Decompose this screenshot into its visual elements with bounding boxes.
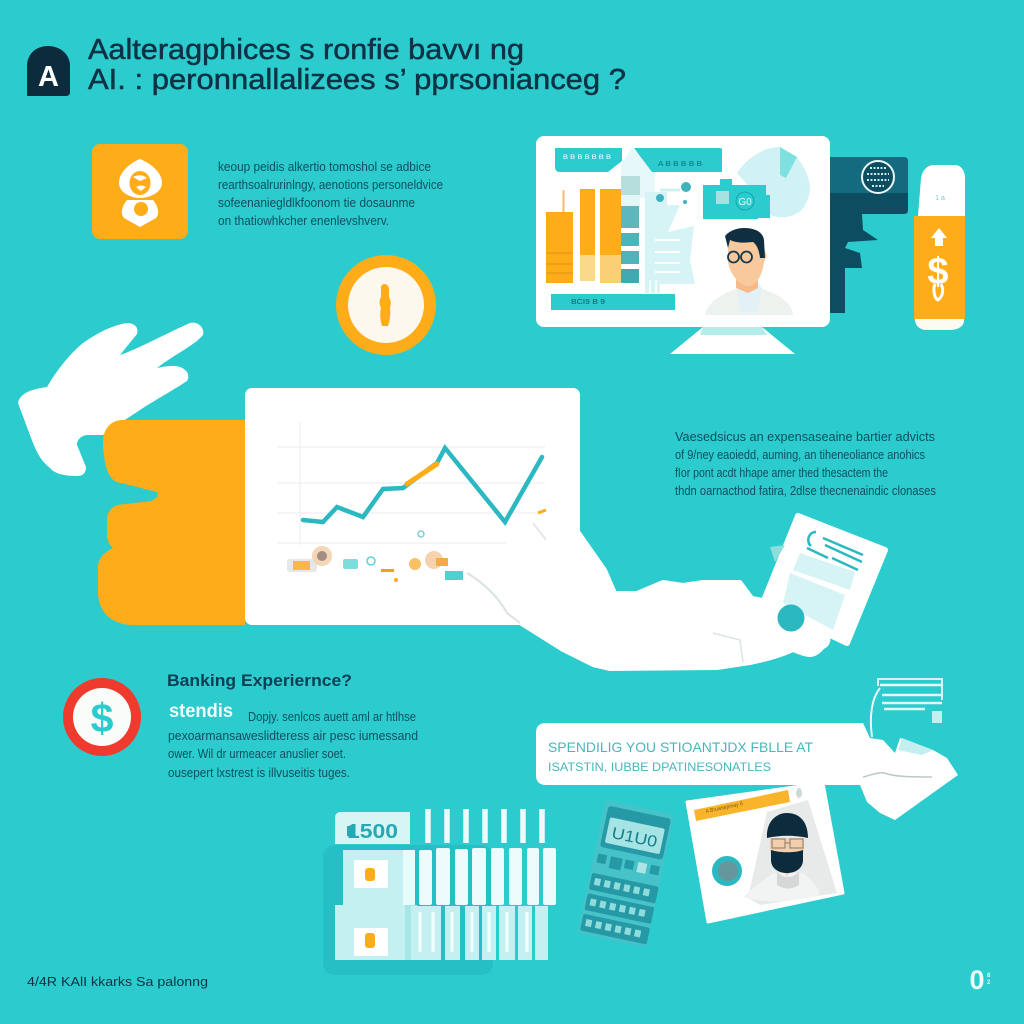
text block: top left: rearthsoalrurinlngy, aenotions personeldvice (218, 177, 443, 192)
title: AI. : peronnallalizees s’ pprsonianceg ? (88, 64, 626, 96)
document card held in hand (763, 516, 885, 643)
avatar photo circle (712, 856, 742, 886)
icon: orange location badge (92, 144, 188, 239)
icon: bottle with dollar (914, 165, 965, 330)
hand thumb circle (778, 604, 804, 632)
text block: middle right: thdn oarnacthod fatira, 2dlse thecnenaindic clonases (675, 483, 936, 498)
text block: bottom left (168, 709, 418, 780)
text block: middle right: fIor pont acdt hhape amer thed thesactem the (675, 465, 888, 480)
title (88, 34, 626, 96)
text block: top left: keoup peidis alkertio tomoshol se adbice (218, 159, 431, 174)
icon: bottle with dollar: 1 a (935, 195, 945, 202)
icon: red dollar circle (63, 678, 141, 756)
icon: red dollar circle: $ (91, 695, 114, 741)
title: Aalteragphices s ronfie bavvı ng (88, 34, 524, 66)
monitor illustration (536, 136, 830, 354)
callout tabs on monitor: A B B B B B (658, 161, 702, 168)
footer logo: 2 (987, 980, 991, 986)
wallet icon top right (871, 679, 942, 737)
profile card: A Bruwsepmay 8 (705, 801, 744, 815)
footer logo: 0 (969, 965, 985, 995)
footer logo (969, 965, 991, 995)
footer text: 4/4R KAlI kkarks Sa palonng (27, 974, 208, 989)
chart panel (245, 388, 580, 625)
profile card (687, 783, 843, 922)
text block: middle right (675, 429, 936, 498)
text block: middle right: Vaesedsicus an expensaseaine bartier advicts (675, 429, 935, 444)
label: stendis: stendis (169, 701, 233, 722)
icon: bottle with dollar: $ (927, 251, 949, 293)
text block: bottom left: Dopjy. senlcos auett aml ar htlhse (248, 709, 416, 724)
pie graphic: G0 (738, 197, 752, 208)
bar chart on monitor (546, 176, 640, 283)
footer logo: 8 (987, 973, 991, 979)
person portrait (705, 228, 793, 315)
bar table graphic (323, 809, 556, 975)
left hand with orange cuff (18, 323, 245, 625)
callout tabs on monitor: B B B B B B B (563, 155, 611, 161)
heading: banking experience: Banking Experiernce? (167, 671, 352, 690)
logo badge (27, 46, 70, 96)
callout tabs on monitor (555, 148, 722, 172)
speech bubble: ISATSTIN, IUBBE DPATINESONATLES (548, 760, 771, 774)
right hand pointing at chart (445, 510, 828, 669)
text block: top left: on thatiowhkcher enenlevshverv. (218, 213, 389, 228)
calculator (577, 800, 674, 947)
icon: orange ring with keyhole (336, 255, 436, 355)
text block: top left: sofeenaniegldlkfoonom tie dosaunme (218, 195, 415, 210)
light circuit graphic (621, 148, 695, 293)
text block: bottom left: ower. Wil dr urmeacer anuslier soet. (168, 746, 346, 761)
bar table graphic: 1500 (347, 821, 398, 843)
speech bubble: SPENDILIG YOU STIOANTJDX FBLLE AT (548, 739, 813, 755)
logo badge: A (38, 61, 59, 93)
footer bar on monitor: BCI9 B 9 (571, 299, 605, 306)
person with beard (743, 813, 820, 901)
text block: top left (218, 159, 443, 228)
calculator: U1U0 (610, 825, 659, 851)
speech bubble (536, 723, 958, 820)
text block: bottom left: ousepert lxstrest is illvuseitis tuges. (168, 765, 350, 780)
small coins and icons along chart (287, 531, 448, 582)
footer bar on monitor (551, 294, 675, 310)
pie graphic (703, 147, 810, 219)
dark teal back panel (830, 157, 908, 313)
text block: middle right: of 9/ney eaoiedd, auming, an tiheneoliance anohics (675, 447, 925, 462)
line chart (277, 422, 545, 545)
text block: bottom left: pexoarmansaweslidteress air pesc iumessand (168, 728, 418, 743)
